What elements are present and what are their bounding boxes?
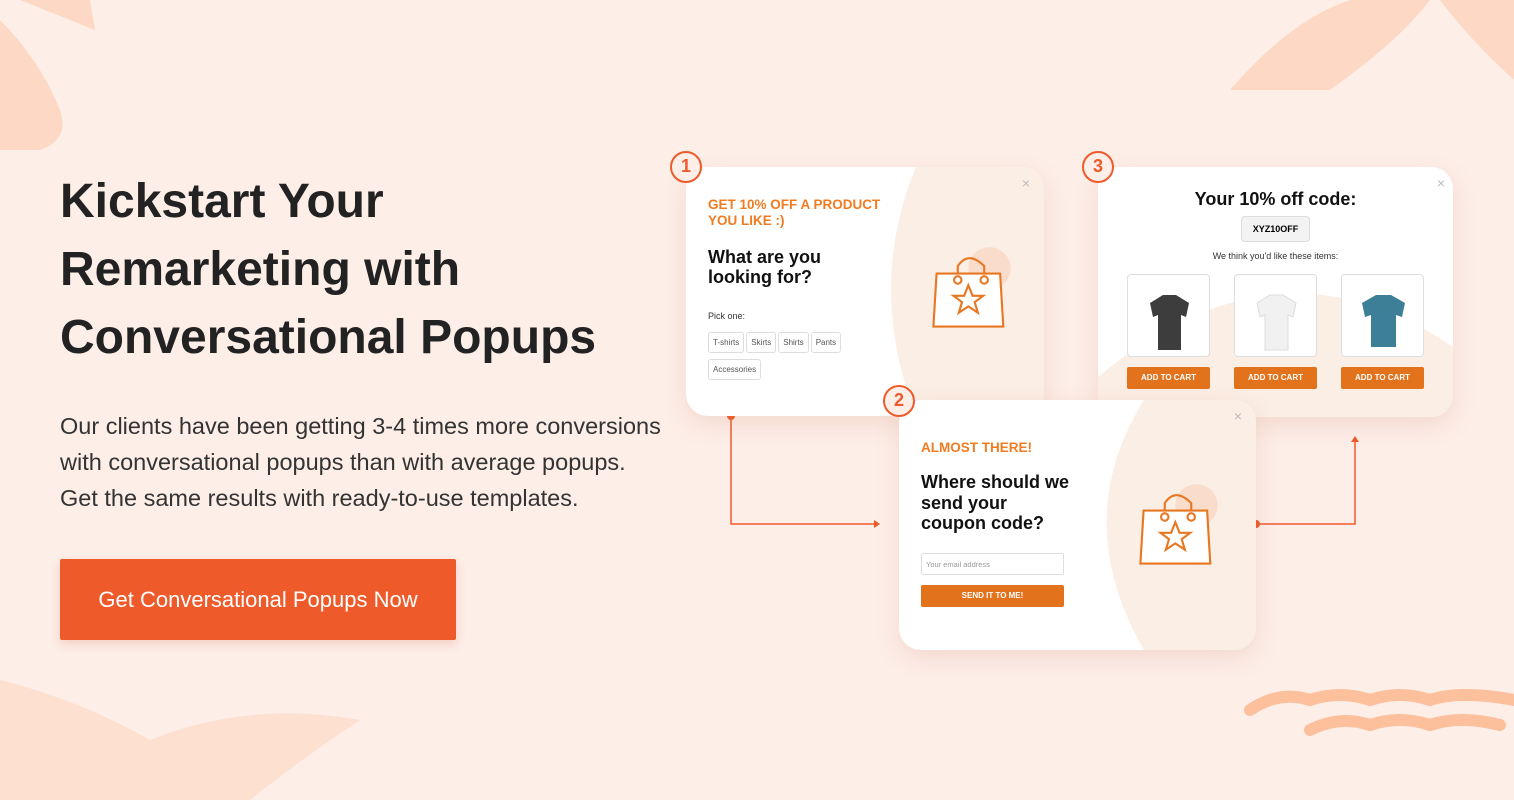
description: Get the same results with ready-to-use templates. — [60, 485, 579, 511]
popup 2: coupon code? — [921, 513, 1044, 533]
description: Our clients have been getting 3-4 times more conversions — [60, 413, 661, 439]
popup 1: YOU LIKE :) — [708, 213, 784, 228]
popup 1: Pick one: — [708, 311, 745, 321]
popup 1 — [686, 167, 1044, 416]
popup 1: GET 10% OFF A PRODUCT — [708, 197, 880, 212]
description — [60, 413, 661, 511]
popup 1: Skirts — [751, 338, 771, 347]
product tiles: ADD TO CART — [1141, 373, 1196, 382]
popup 1: looking for? — [708, 267, 812, 287]
popup 2: ALMOST THERE! — [921, 440, 1032, 455]
title: Kickstart Your — [60, 175, 384, 228]
description: with conversational popups than with average popups. — [60, 449, 626, 475]
product tiles: ADD TO CART — [1355, 373, 1410, 382]
popup 1: Pants — [816, 338, 836, 347]
popup 1: Accessories — [713, 365, 756, 374]
popup 3 — [1098, 167, 1453, 417]
title — [60, 175, 596, 364]
title: Conversational Popups — [60, 311, 596, 364]
popup 3: We think you'd like these items: — [1213, 251, 1338, 261]
popup 2: Where should we — [921, 472, 1069, 492]
product tiles — [1127, 274, 1424, 389]
popup 3: Your 10% off code: — [1195, 189, 1356, 209]
popup 1: Shirts — [783, 338, 804, 347]
popup 2: send your — [921, 492, 1007, 512]
number badge 3 — [1082, 151, 1114, 183]
number badge 1: 1 — [681, 156, 691, 176]
popup 3: × — [1437, 175, 1445, 191]
CTA button — [60, 559, 456, 640]
CTA button: Get Conversational Popups Now — [98, 587, 418, 612]
popup 2: Your email address — [926, 560, 990, 569]
popup 1: T-shirts — [713, 338, 739, 347]
product tiles: ADD TO CART — [1248, 373, 1303, 382]
number badge 3: 3 — [1093, 156, 1103, 176]
popup 2: × — [1234, 408, 1242, 424]
popup 1: × — [1022, 175, 1030, 191]
number badge 1 — [670, 151, 702, 183]
number badge 2: 2 — [894, 390, 904, 410]
number badge 2 — [883, 385, 915, 417]
title: Remarketing with — [60, 243, 460, 296]
popup 3: XYZ10OFF — [1253, 224, 1298, 234]
popup 2 — [899, 400, 1256, 650]
popup 1: What are you — [708, 247, 821, 267]
popup 2: SEND IT TO ME! — [962, 591, 1023, 600]
